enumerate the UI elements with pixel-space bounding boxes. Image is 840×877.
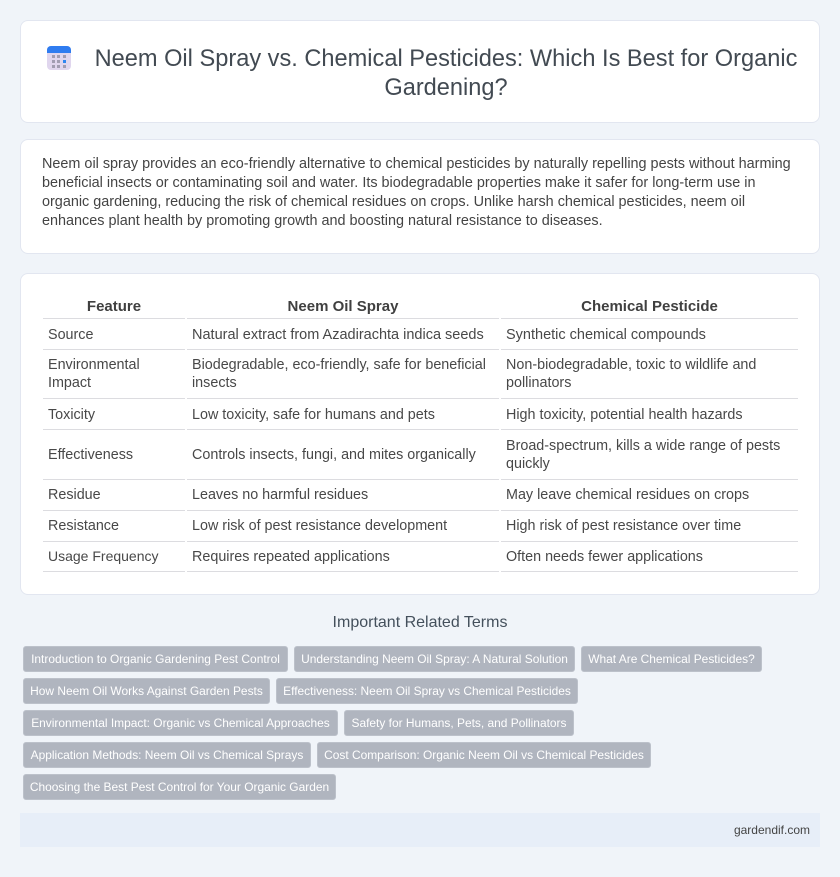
- row: resistance: Low risk of pest resistance development: [192, 518, 447, 534]
- tag: Choosing the Best Pest Control for Your Organic Garden: [30, 780, 329, 794]
- row: residue: [48, 487, 749, 503]
- row: source: [48, 327, 706, 343]
- row: effectiveness: quickly: [506, 456, 550, 472]
- tag: Effectiveness: Neem Oil Spray vs Chemical Pesticides: [283, 684, 571, 698]
- row: environmental impact: Non-biodegradable, toxic to wildlife and: [506, 357, 756, 373]
- panel: comparison table: [20, 273, 820, 595]
- row: toxicity: [48, 407, 743, 423]
- tag: [23, 710, 338, 736]
- table header: Feature: [87, 298, 141, 315]
- row: environmental impact: Biodegradable, eco-friendly, safe for beneficial: [192, 357, 486, 373]
- row: source: Natural extract from Azadirachta indica seeds: [192, 327, 484, 343]
- panel: introduction: [20, 139, 820, 254]
- title: [95, 46, 797, 101]
- row: residue: Residue: [48, 487, 101, 503]
- row: environmental impact: pollinators: [506, 375, 571, 391]
- tag: [23, 742, 311, 768]
- intro paragraph: enhances plant health by promoting growth and boosting natural resistance to diseases.: [42, 213, 603, 229]
- row: environmental impact: insects: [192, 375, 237, 391]
- tag: [23, 678, 270, 704]
- tag: Understanding Neem Oil Spray: A Natural Solution: [301, 652, 568, 666]
- tag: [23, 646, 288, 672]
- title: Gardening?: [384, 75, 508, 101]
- row: effectiveness: Controls insects, fungi, and mites organically: [192, 447, 476, 463]
- row: toxicity: Low toxicity, safe for humans and pets: [192, 407, 435, 423]
- row: source: Synthetic chemical compounds: [506, 327, 706, 343]
- row: resistance: High risk of pest resistance over time: [506, 518, 741, 534]
- panel: header: [20, 20, 820, 123]
- row: environmental impact: [48, 357, 756, 391]
- tag: Introduction to Organic Gardening Pest Control: [31, 652, 280, 666]
- title: Neem Oil Spray vs. Chemical Pesticides: Which Is Best for Organic: [95, 46, 797, 72]
- row: effectiveness: [48, 438, 780, 472]
- tag: [317, 742, 651, 768]
- panel: related term tags: [23, 646, 762, 800]
- row: environmental impact: Impact: [48, 375, 91, 391]
- tag: Application Methods: Neem Oil vs Chemical Sprays: [31, 748, 303, 762]
- row: usage frequency: Often needs fewer applications: [506, 549, 703, 565]
- row: effectiveness: Effectiveness: [48, 447, 133, 463]
- row: environmental impact: Environmental: [48, 357, 140, 373]
- row: usage frequency: Usage Frequency: [48, 548, 159, 564]
- footer source text: gardendif.com: [734, 823, 810, 837]
- tag: How Neem Oil Works Against Garden Pests: [30, 684, 263, 698]
- table header: Neem Oil Spray: [288, 298, 398, 315]
- row: usage frequency: Requires repeated applications: [192, 549, 390, 565]
- table header: Chemical Pesticide: [581, 298, 718, 315]
- heading: important related terms: Important Related Terms: [333, 614, 507, 631]
- row: effectiveness: Broad-spectrum, kills a wide range of pests: [506, 438, 780, 454]
- tag: [23, 774, 336, 800]
- row: toxicity: High toxicity, potential health hazards: [506, 407, 743, 423]
- tag: [276, 678, 578, 704]
- intro paragraph: organic gardening, reducing the risk of chemical residues on crops. Unlike harsh chemical pesticides, neem oil: [42, 194, 745, 210]
- intro paragraph: beneficial insects or contaminating soil and water. Its biodegradable properties make it safer for long-term use in: [42, 175, 755, 191]
- footer: [20, 813, 820, 847]
- table header: [87, 298, 718, 315]
- tag: Environmental Impact: Organic vs Chemical Approaches: [31, 716, 330, 730]
- intro paragraph: [42, 156, 791, 229]
- icon: calendar: [47, 46, 71, 70]
- row: residue: May leave chemical residues on crops: [506, 487, 749, 503]
- row: resistance: Resistance: [48, 518, 119, 534]
- row: usage frequency: [48, 548, 703, 565]
- tag: Cost Comparison: Organic Neem Oil vs Chemical Pesticides: [324, 748, 644, 762]
- tag: What Are Chemical Pesticides?: [588, 652, 755, 666]
- row: resistance: [48, 518, 741, 534]
- row: toxicity: Toxicity: [48, 407, 95, 423]
- row: residue: Leaves no harmful residues: [192, 487, 368, 503]
- tag: [344, 710, 574, 736]
- intro paragraph: Neem oil spray provides an eco-friendly alternative to chemical pesticides by naturally repelling pests without harming: [42, 156, 791, 172]
- row: source: Source: [48, 327, 93, 343]
- tag: [581, 646, 762, 672]
- tag: [294, 646, 575, 672]
- tag: Safety for Humans, Pets, and Pollinators: [352, 716, 566, 730]
